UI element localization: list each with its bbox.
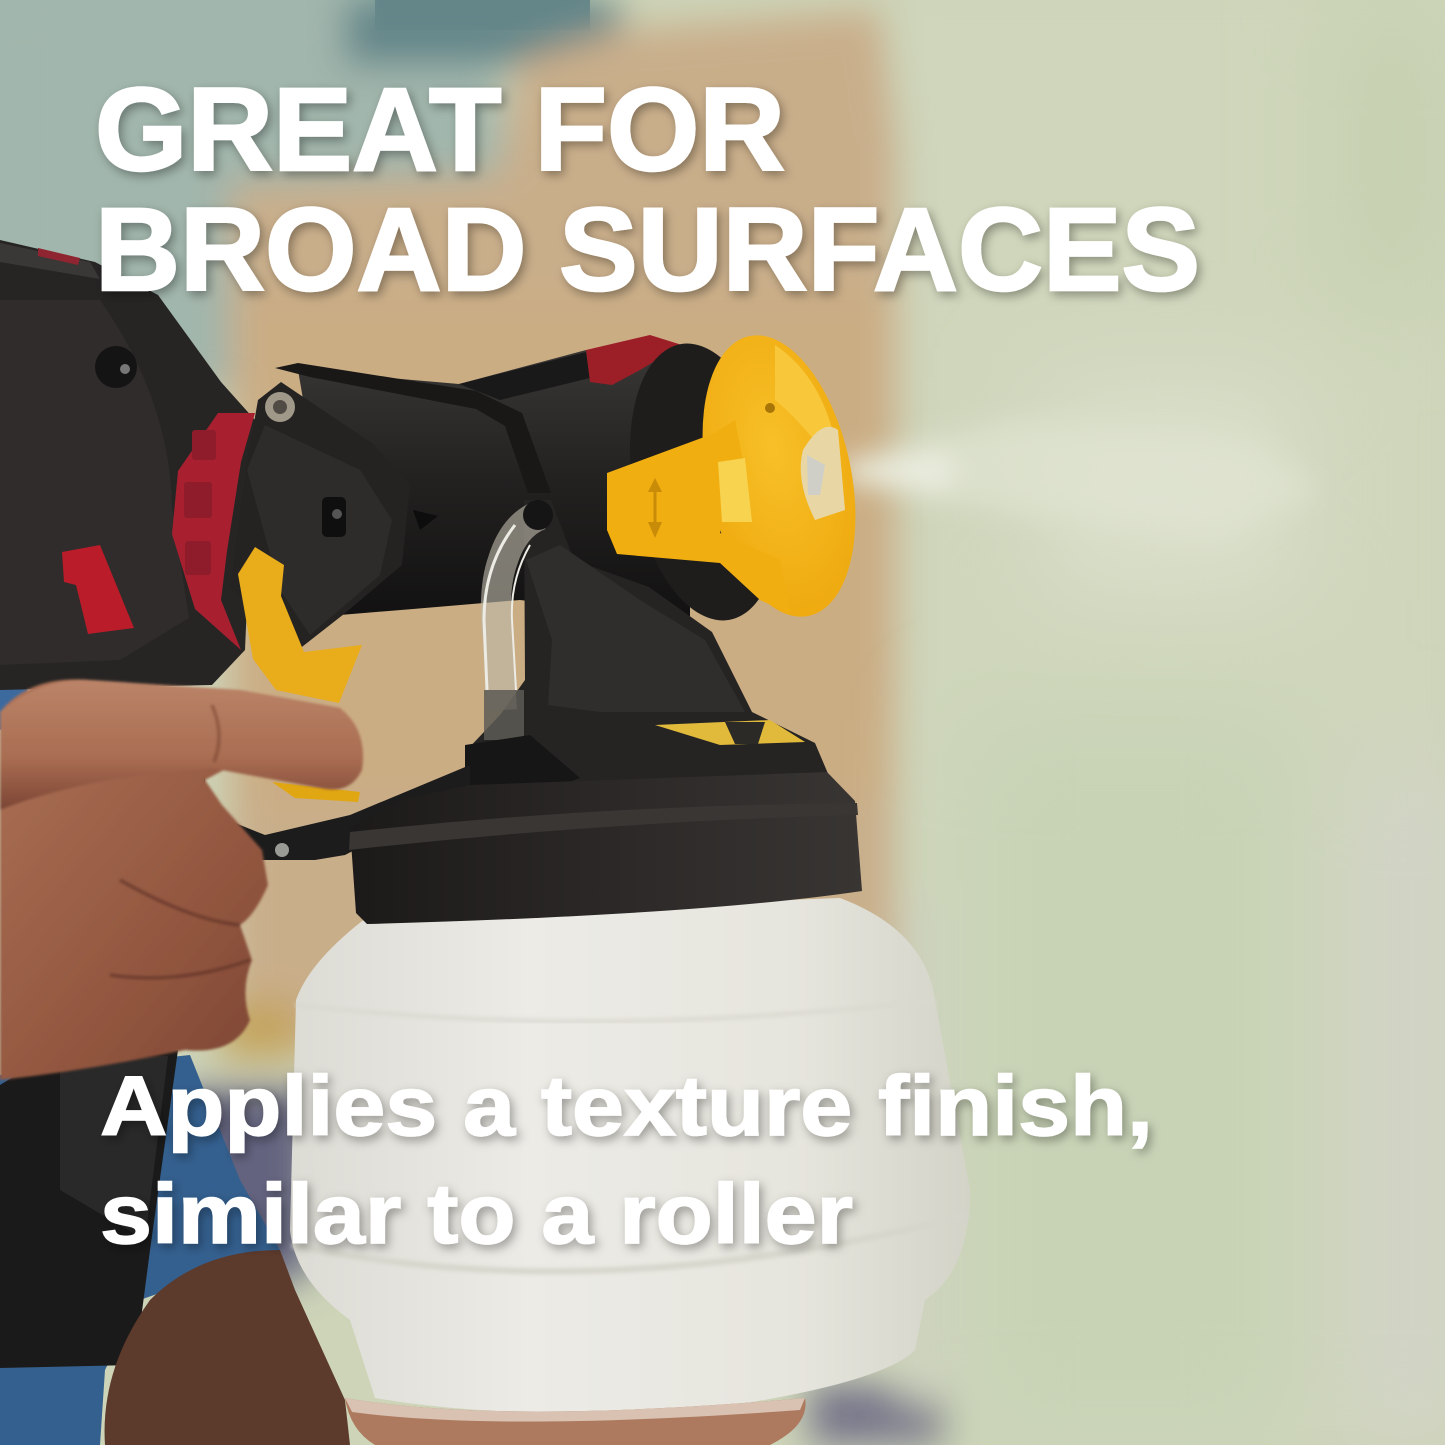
arm sleeve (0, 680, 280, 1445)
red switch (62, 545, 134, 634)
nozzle: yellow cap (607, 321, 879, 632)
clear tube (496, 515, 540, 710)
title: GREAT FOR (95, 64, 785, 196)
fingers (0, 679, 363, 1080)
neck (465, 500, 832, 800)
handle lower (0, 1048, 178, 1368)
spray gun body (0, 240, 832, 1368)
subtitle: similar to a roller (100, 1167, 853, 1261)
title (95, 64, 1200, 316)
lever (165, 770, 205, 815)
paint container tank (290, 898, 970, 1413)
subtitle (100, 1059, 1153, 1261)
trigger: yellow (238, 547, 362, 802)
lower hand (105, 1250, 350, 1445)
hood (230, 382, 410, 650)
tube base fitting (465, 735, 580, 808)
title: BROAD SURFACES (95, 184, 1200, 316)
top ridge arm (275, 363, 551, 493)
gun rear housing (0, 240, 255, 690)
strap (215, 765, 470, 860)
red top button (586, 335, 682, 385)
container lid (349, 772, 862, 924)
hand (0, 679, 806, 1445)
red dial (172, 413, 255, 650)
barrel (298, 345, 690, 620)
subtitle: Applies a texture finish, (100, 1059, 1153, 1153)
spray mist (842, 420, 1320, 540)
